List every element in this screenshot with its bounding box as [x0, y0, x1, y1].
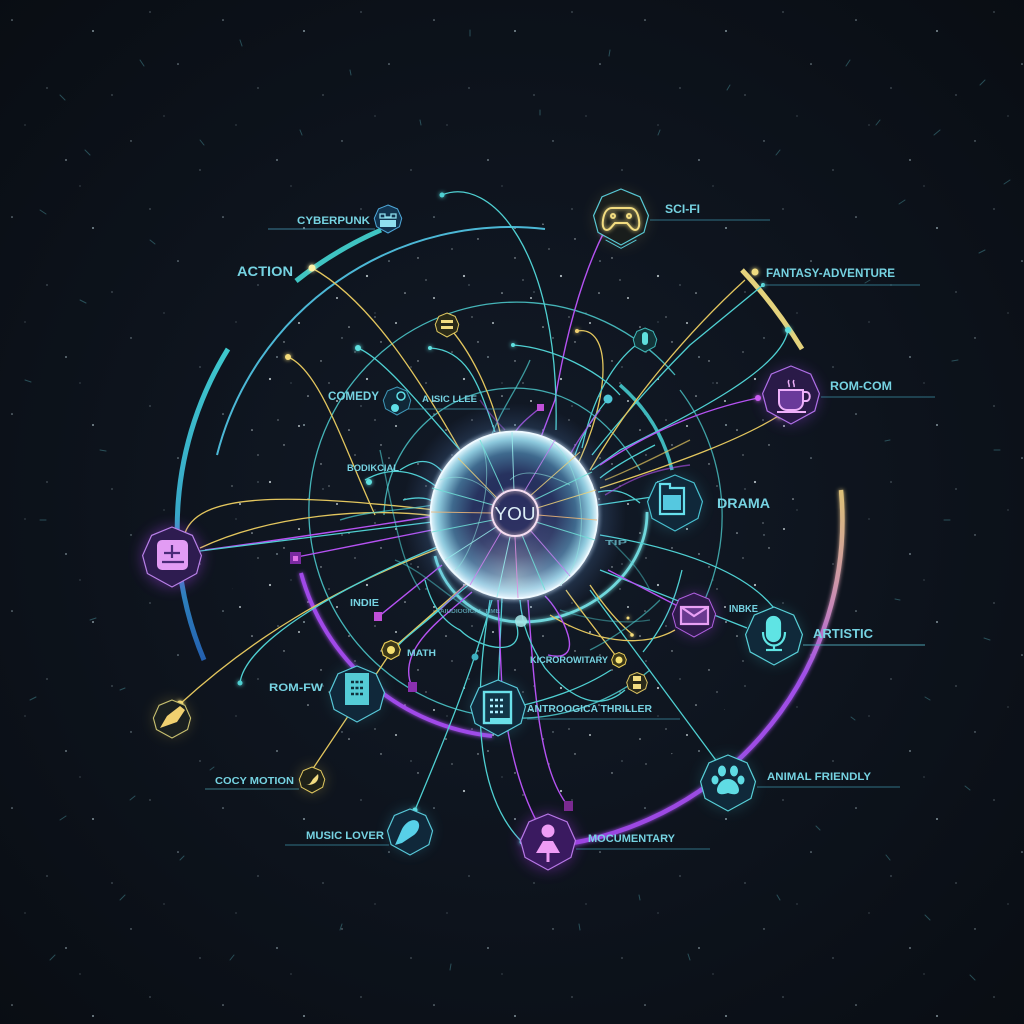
node shape: thriller	[471, 680, 525, 736]
arc: left thick	[177, 349, 228, 660]
icon: chat document	[345, 673, 369, 705]
node glow	[763, 368, 819, 424]
arc: outer thin blue	[217, 227, 545, 455]
label: kicrorowitary: KICROROWITARY	[530, 655, 608, 665]
leader: a isic llee	[408, 408, 510, 410]
arc: purple and gold outer	[525, 490, 842, 848]
icon: envelope	[681, 607, 708, 624]
leader: animal friendly	[757, 786, 900, 788]
label: bodikcial: BODIKCIAL	[347, 463, 400, 473]
icon: cyberpunk box	[380, 214, 396, 227]
inner labels	[328, 391, 628, 665]
node shape: inbke	[672, 593, 716, 637]
icon: coffee cup	[777, 380, 810, 412]
label: tip: TIP	[605, 540, 628, 547]
label: center lower: AIUDIOGICAL TIME	[440, 609, 500, 615]
icon: person	[536, 824, 560, 862]
leader: sci-fi	[650, 219, 770, 221]
small node: purple left	[290, 552, 301, 564]
label: cyberpunk: CYBERPUNK	[297, 215, 370, 227]
arc: purple lower left	[301, 573, 492, 736]
icon: document	[484, 692, 511, 723]
small node: documentary yellow	[612, 652, 626, 668]
connection end dots	[176, 192, 791, 844]
sphere halo	[402, 403, 626, 627]
node glow	[520, 814, 576, 870]
icon: brush	[160, 706, 185, 728]
icon: pen	[395, 820, 419, 845]
node shape: sci-fi	[594, 189, 648, 245]
small node: teal bottom	[515, 615, 527, 627]
label: action: ACTION	[237, 263, 293, 279]
node: cyberpunk	[268, 205, 402, 233]
node shape: music lover	[387, 809, 433, 855]
leader: artistic	[803, 644, 925, 646]
sphere inner rays	[431, 432, 597, 598]
node glow	[648, 476, 702, 530]
sphere surface curves	[440, 440, 581, 585]
label: animal friendly: ANIMAL FRIENDLY	[767, 771, 872, 783]
sphere lower light	[430, 431, 598, 599]
icon: folder flap	[663, 495, 681, 510]
label: rom-fw: ROM-FW	[269, 682, 324, 694]
node glow	[471, 681, 525, 735]
leader: cyberpunk	[268, 228, 375, 230]
icon: left hub panel	[157, 540, 188, 570]
label: fantasy-adventure: FANTASY-ADVENTURE	[766, 268, 895, 280]
node: thriller	[471, 680, 680, 736]
small node: comedy	[383, 387, 411, 415]
central sphere	[402, 403, 626, 627]
small node: purple upper	[537, 404, 544, 411]
node: cocy motion	[205, 767, 325, 793]
node: inbke	[672, 593, 758, 637]
node: left hub	[142, 527, 202, 587]
connection lines	[180, 192, 788, 842]
label: comedy: COMEDY	[328, 391, 379, 403]
label: artistic: ARTISTIC	[813, 626, 874, 641]
node: mocumentary	[520, 814, 710, 870]
node: sci-fi	[594, 189, 770, 248]
leader: rom-com	[821, 396, 935, 398]
node: rom-fw	[269, 666, 384, 722]
node shape: rom-com	[763, 366, 819, 424]
node: animal friendly	[701, 755, 900, 811]
label: thriller: ANTROOGICA THRILLER	[527, 704, 653, 715]
node shape: artistic	[746, 607, 802, 665]
label: indie: INDIE	[350, 598, 379, 609]
YOU label: YOU	[494, 504, 536, 524]
node glow	[142, 527, 202, 587]
outer arcs	[177, 227, 842, 848]
node glow	[154, 700, 190, 736]
small node: teal upper	[604, 394, 612, 404]
node: brush	[153, 700, 191, 738]
label: math: MATH	[407, 648, 436, 659]
leader: mocumentary	[576, 848, 710, 850]
icon: folder	[660, 484, 684, 514]
small node: top yellow	[435, 313, 459, 337]
small node: purple math	[408, 682, 417, 692]
label: music lover: MUSIC LOVER	[306, 830, 384, 842]
node glow	[674, 594, 716, 636]
small node: mic teal	[633, 328, 657, 352]
node: music lover	[285, 809, 433, 855]
node shape: cocy motion	[299, 767, 325, 793]
icon: microphone	[763, 617, 785, 650]
node glow	[389, 810, 431, 852]
small node: purple indie	[374, 612, 382, 621]
small nodes	[290, 313, 657, 811]
label: a isic llee: A ISIC LLEE	[422, 394, 477, 404]
chevron: sci-fi	[606, 240, 636, 248]
node shape: cyberpunk	[374, 205, 402, 233]
label: sci-fi: SCI-FI	[665, 202, 700, 216]
small node: right yellow	[627, 672, 647, 694]
leader: music lover	[285, 844, 389, 846]
node: rom-com	[763, 366, 935, 424]
ring: middle	[309, 302, 675, 718]
arc: action	[296, 230, 381, 281]
small node: teal lower	[472, 654, 478, 660]
leader: cocy motion	[205, 788, 299, 790]
node: artistic	[746, 607, 925, 665]
icon: game controller	[603, 208, 639, 230]
arc: teal hugging sphere	[435, 512, 647, 622]
node shape: mocumentary	[521, 814, 575, 870]
arc: fantasy yellow	[742, 270, 802, 349]
node glow	[330, 667, 384, 721]
leader: fantasy-adventure	[763, 284, 920, 286]
icon: paw	[712, 766, 744, 794]
arc: thick teal upper right	[620, 385, 672, 470]
node glow	[594, 191, 648, 245]
node shape: animal friendly	[701, 755, 755, 811]
leader: thriller	[527, 718, 680, 720]
label: cocy motion: COCY MOTION	[215, 776, 294, 787]
ring: inner	[384, 388, 640, 515]
small node: purple low	[564, 801, 573, 811]
small node: math yellow	[382, 640, 400, 660]
label: inbke: INBKE	[729, 604, 758, 615]
node shape: drama	[648, 475, 702, 531]
icon: brush	[306, 774, 318, 785]
arc: right thin	[680, 390, 722, 610]
sphere body	[430, 431, 598, 599]
node shape: left hub	[143, 527, 201, 587]
node glow	[701, 756, 755, 810]
node glow	[299, 767, 325, 793]
node shape: rom-fw	[330, 666, 384, 722]
node: drama	[648, 475, 770, 531]
node shape: brush	[153, 700, 191, 738]
label: rom-com: ROM-COM	[830, 379, 892, 393]
sphere rim	[430, 432, 598, 598]
YOU ring	[492, 490, 538, 536]
node glow	[747, 609, 801, 663]
label: drama: DRAMA	[717, 495, 770, 511]
label: mocumentary: MOCUMENTARY	[588, 833, 676, 845]
